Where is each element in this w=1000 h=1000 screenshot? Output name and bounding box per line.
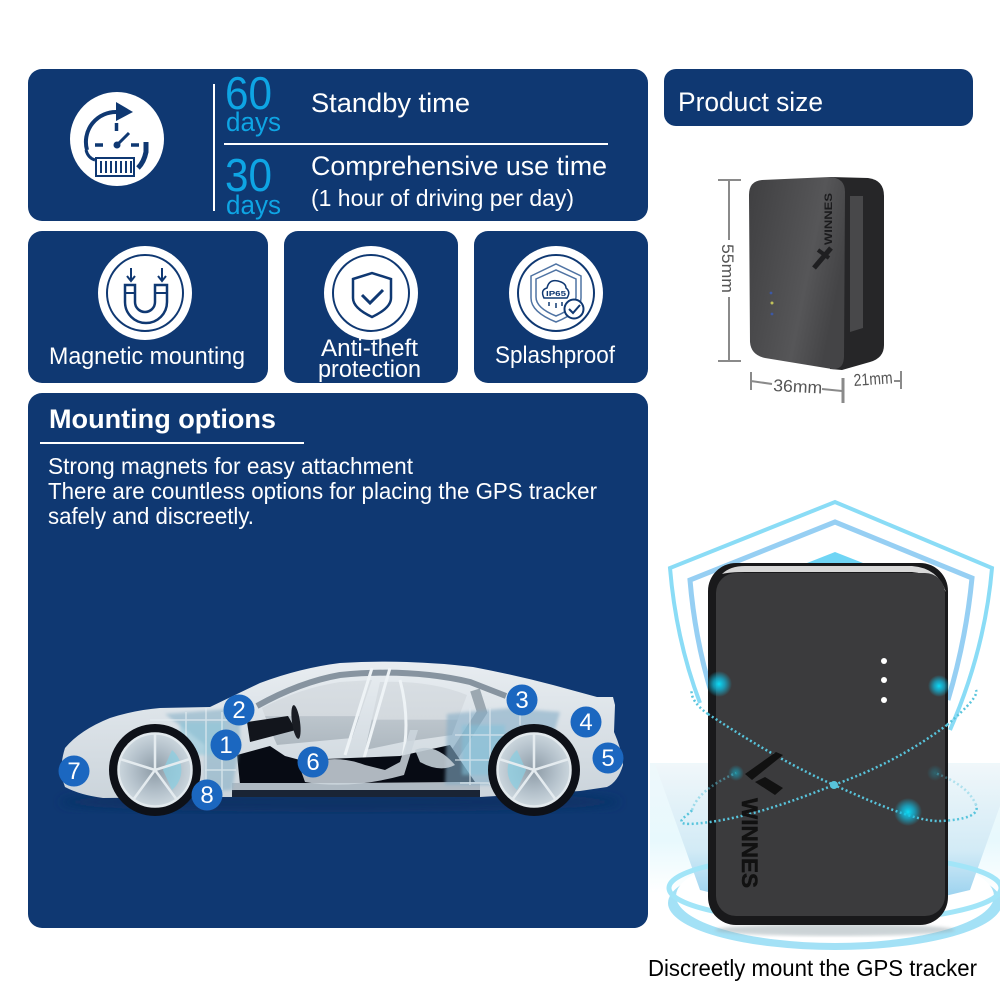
device front [749, 177, 845, 369]
label: comprehensive use time: Comprehensive use time [311, 151, 607, 181]
front machinery [165, 708, 240, 792]
caption: discreet mounting: Discreetly mount the GPS tracker [648, 955, 977, 981]
car sill [232, 783, 480, 790]
orbit lines [681, 690, 977, 824]
panel: splashproof [474, 231, 648, 383]
text block: mounting description: safely and discreetly. [48, 503, 254, 529]
label: anti-theft protection [318, 335, 421, 383]
dimension: 55mm [718, 180, 741, 361]
dimension: 55mm: 55mm [718, 244, 737, 293]
label: splashproof: Splashproof [495, 342, 615, 369]
steering wheel [290, 705, 302, 739]
front frame lines [150, 708, 240, 790]
label: comprehensive use time [311, 151, 607, 211]
text block: mounting description [48, 453, 597, 529]
panel: magnetic mounting [28, 231, 268, 383]
divider: horizontal [224, 143, 608, 145]
device side strip [850, 196, 863, 332]
dimension: 36mm: 36mm [773, 376, 823, 398]
lower ring interior [676, 849, 994, 943]
device side [830, 177, 884, 370]
panel: anti-theft protection [284, 231, 458, 383]
dashboard [247, 716, 296, 742]
icon: shield check [324, 246, 418, 340]
mount point badges: 6 [306, 749, 320, 776]
lower ring [668, 856, 1000, 950]
dimension: 21mm: 21mm [853, 368, 893, 390]
background haze [650, 763, 1000, 893]
mount point badges: 5 [601, 745, 615, 772]
heading: mounting options: Mounting options [49, 404, 276, 434]
icon: magnet [98, 246, 192, 340]
panel: product size header [664, 69, 973, 126]
car body [62, 662, 623, 798]
heading underline [40, 442, 304, 444]
rear pillar [448, 690, 482, 765]
icon: IP65 shield: IP65 [546, 291, 566, 298]
divider: vertical [213, 84, 215, 211]
stat: 30 days: 30 [225, 149, 272, 201]
shield tip [807, 552, 863, 563]
icon: IP65 shield [509, 246, 603, 340]
mount point badges: 1 [219, 732, 233, 759]
outer shield [670, 502, 992, 730]
tracker logo: WINNES [737, 798, 762, 888]
mount point badges: 4 [579, 709, 593, 736]
label: comprehensive use time: (1 hour of driving per day) [311, 185, 574, 211]
device LEDs [770, 292, 774, 315]
orbit glows [706, 671, 950, 826]
inner shield [690, 522, 972, 700]
illustration: tracker with shield [650, 502, 1000, 950]
seats [300, 730, 418, 785]
car floor [237, 745, 475, 784]
text block: mounting description: Strong magnets for easy attachment [48, 453, 414, 479]
door pillar glass [345, 668, 406, 772]
panel: battery life [28, 67, 648, 221]
tracker top highlight [722, 566, 946, 592]
tracker face [716, 573, 945, 916]
device shadow [715, 924, 955, 936]
stat: 30 days: days [226, 190, 281, 220]
label: magnetic mounting: Magnetic mounting [49, 343, 245, 370]
mount point badges: 8 [200, 782, 214, 809]
mount point badges: 7 [67, 758, 81, 785]
mount point badges: 3 [515, 687, 529, 714]
illustration: transparent car [58, 662, 624, 816]
front wheel [109, 724, 201, 816]
tracker logo [737, 752, 783, 888]
rear frame lines [455, 708, 520, 785]
label: anti-theft protection: protection [318, 356, 421, 383]
label: standby time: Standby time [311, 88, 470, 118]
roof band [257, 673, 506, 706]
stat: 60 days [225, 67, 281, 137]
rear wheel [488, 724, 580, 816]
upper ring [669, 854, 1000, 922]
stat: 30 days [225, 149, 281, 220]
icon: battery clock [70, 92, 164, 186]
label: anti-theft protection: Anti-theft [321, 335, 418, 362]
mount point badges [58, 684, 624, 810]
tracker LEDs [881, 658, 887, 703]
stat: 60 days: 60 [225, 67, 272, 119]
tracker body [708, 563, 948, 925]
heading: product size: Product size [678, 87, 823, 117]
text block: mounting description: There are countless options for placing the GPS tracker [48, 478, 597, 504]
rear window [365, 682, 467, 750]
diagram: product dimensions [718, 177, 901, 403]
scanning beam [655, 764, 1000, 908]
front window [262, 680, 372, 745]
dimension: 36mm [751, 372, 843, 403]
device logo [814, 193, 835, 268]
stat: 60 days: days [226, 107, 281, 137]
mount point badges: 2 [232, 697, 246, 724]
rear machinery [445, 708, 560, 785]
panel: mounting options [28, 393, 648, 928]
device logo: WINNES [823, 193, 835, 245]
